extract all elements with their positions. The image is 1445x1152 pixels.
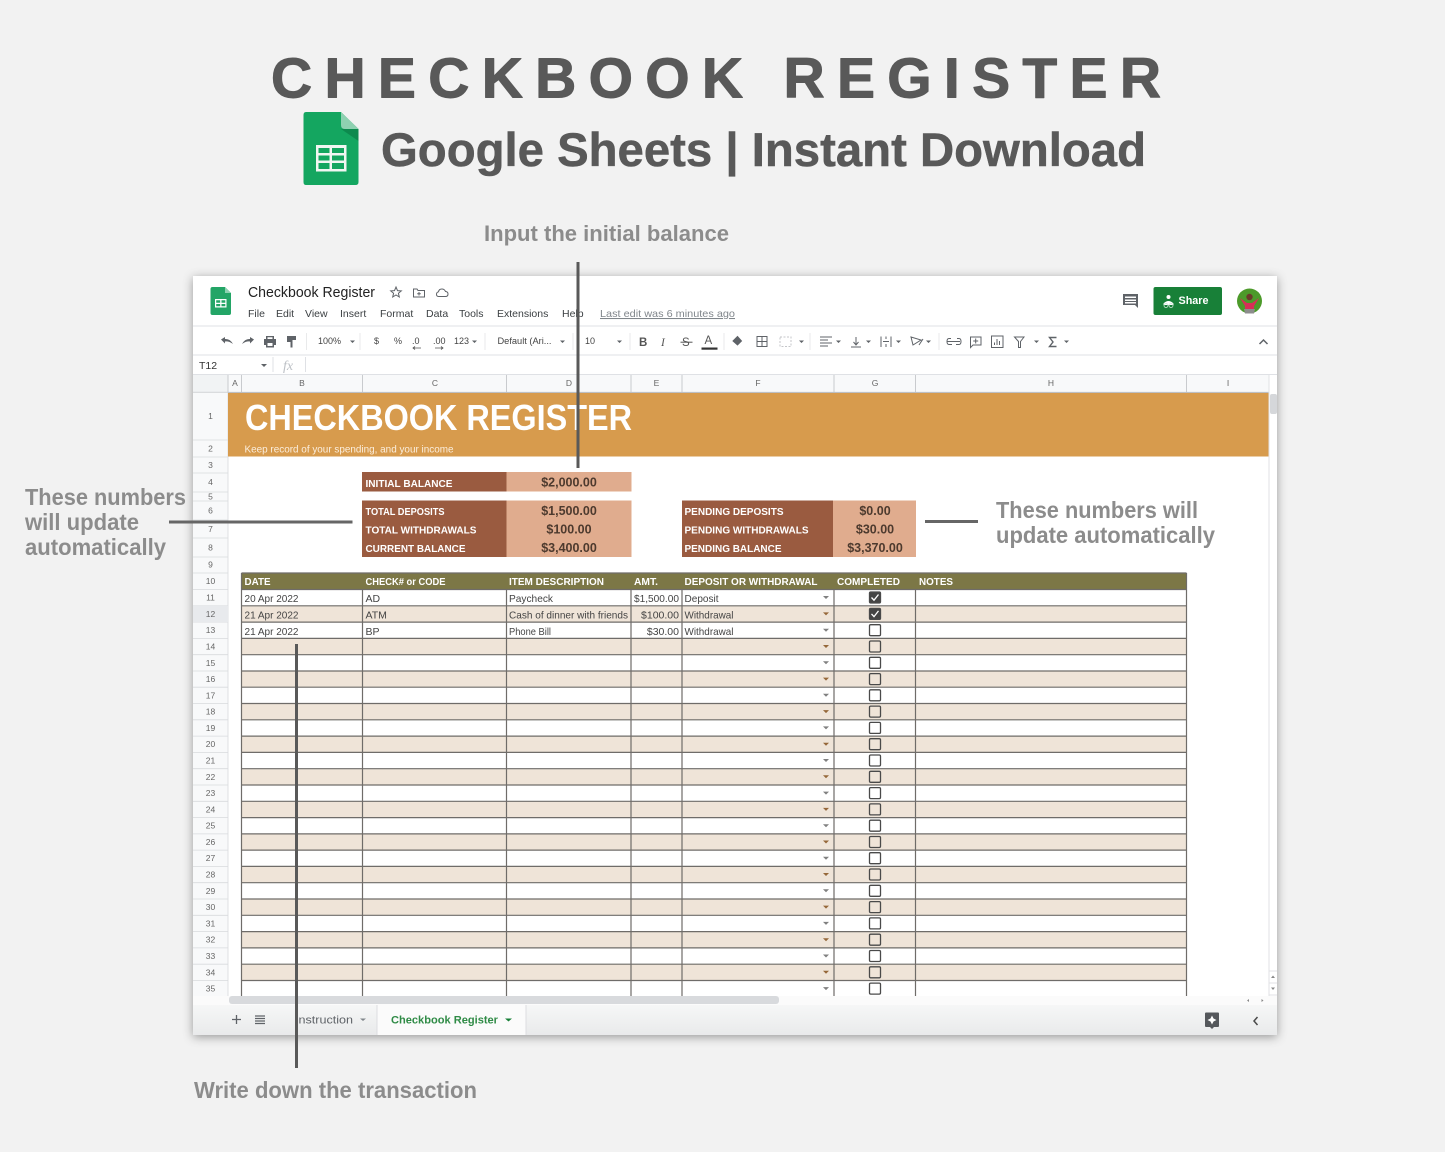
row headers: 6 [208, 506, 213, 516]
toolbar text style icons: A [704, 335, 712, 347]
toolbar history and print icons [221, 336, 296, 348]
panel: initial balance [362, 472, 632, 492]
annotation: left numbers note [24, 484, 186, 560]
row headers: 24 [206, 804, 215, 814]
row headers: 27 [206, 853, 215, 863]
arrow: initial balance pointer [576, 262, 580, 468]
document name: Checkbook Register [248, 285, 375, 301]
panel: totals: TOTAL DEPOSITS [366, 506, 444, 518]
row headers: 5 [208, 492, 213, 502]
panel: pending totals: $3,370.00 [847, 541, 903, 555]
transaction rows: 20 Apr 2022 [244, 593, 299, 605]
transaction rows: AD [366, 593, 381, 605]
spreadsheet window [193, 276, 1277, 1035]
toolbar format labels: .0 [412, 336, 420, 346]
transaction rows: Deposit [684, 593, 719, 605]
toolbar right icons [733, 336, 1268, 348]
icon: explore [1205, 1012, 1219, 1029]
dropdown arrows on white rows [823, 596, 829, 990]
row headers: 13 [206, 625, 215, 635]
row headers: 14 [206, 642, 215, 652]
row headers: 17 [206, 690, 215, 700]
row headers: 4 [208, 477, 213, 487]
row headers: 35 [206, 984, 215, 994]
row headers: 12 [206, 609, 215, 619]
row headers: 16 [206, 674, 215, 684]
dropdown arrows on shaded rows [823, 612, 829, 974]
panel: pending totals: PENDING BALANCE [684, 543, 782, 555]
share button [1154, 287, 1222, 315]
menu bar: Format [380, 308, 413, 320]
transaction rows: Phone Bill [509, 626, 551, 638]
toolbar format labels: $ [374, 336, 379, 346]
icon: sheets mini logo [210, 287, 231, 315]
menu bar: View [305, 308, 328, 320]
row headers [193, 392, 228, 996]
transaction rows: Paycheck [509, 593, 554, 605]
menu bar: Edit [276, 308, 294, 320]
toolbar decimal arrows [413, 346, 443, 350]
annotation: right numbers note: update automatically [996, 522, 1215, 548]
panel: totals: TOTAL WITHDRAWALS [366, 524, 476, 536]
panel: totals: $3,400.00 [541, 541, 597, 555]
toolbar [193, 326, 1277, 374]
row headers: 9 [208, 560, 213, 570]
toolbar text style icons [639, 335, 718, 350]
transaction rows: Withdrawal [684, 610, 734, 622]
menu bar: Tools [459, 308, 484, 320]
row headers: 25 [206, 821, 215, 831]
table header: AMT. [634, 576, 658, 588]
menu bar: Extensions [497, 308, 548, 320]
shaded rows [242, 606, 1186, 980]
toolbar format labels [318, 336, 595, 346]
toolbar format labels: Default (Ari... [498, 336, 552, 346]
row headers: 3 [208, 460, 213, 470]
annotation: right numbers note [996, 497, 1215, 548]
table header: DATE [244, 576, 270, 588]
transaction rows: Cash of dinner with friends [509, 610, 628, 622]
column headers: C [432, 378, 438, 388]
transaction rows: 21 Apr 2022 [244, 610, 299, 622]
panel: initial balance: INITIAL BALANCE [366, 478, 452, 490]
arrow: transaction pointer [295, 644, 298, 1068]
row headers: 34 [206, 967, 215, 977]
row headers: 10 [206, 576, 215, 586]
banner title: CHECKBOOK REGISTER [245, 397, 632, 438]
formula bar: fx [283, 359, 294, 374]
toolbar format labels: 123 [454, 336, 469, 346]
toolbar text style icons: I [660, 337, 666, 349]
transaction table [242, 573, 1186, 996]
subtitle: Google Sheets | Instant Download [381, 123, 1146, 176]
toolbar format labels: 100% [318, 336, 341, 346]
column headers: G [872, 378, 878, 388]
row headers: 26 [206, 837, 215, 847]
annotation: left numbers note: will update [24, 509, 139, 535]
banner [228, 393, 1268, 456]
vertical scrollbar [1269, 375, 1277, 996]
table grid [242, 573, 1186, 996]
table header: COMPLETED [837, 576, 900, 588]
row headers: 2 [208, 444, 213, 454]
annotation: left numbers note: These numbers [25, 484, 186, 510]
table header: DEPOSIT OR WITHDRAWAL [684, 576, 818, 588]
title: CHECKBOOK REGISTER [271, 46, 1161, 110]
table header: NOTES [919, 576, 953, 588]
panel: initial balance: $2,000.00 [541, 476, 597, 490]
avatar [1237, 288, 1262, 314]
row headers: 32 [206, 935, 215, 945]
row headers: 21 [206, 756, 215, 766]
toolbar format labels: % [394, 336, 402, 346]
toolbar text style icons: S [682, 337, 690, 349]
panel: pending totals [682, 500, 916, 557]
annotation: right numbers note: These numbers will [996, 497, 1198, 523]
menu bar: Insert [340, 308, 366, 320]
panel: totals: $1,500.00 [541, 504, 597, 518]
column headers [193, 375, 1269, 392]
row headers: 20 [206, 739, 215, 749]
column headers: B [299, 378, 305, 388]
tab: checkbook register: Checkbook Register [391, 1014, 499, 1026]
column headers: I [1227, 378, 1229, 388]
annotation: write down the transaction: Write down the transaction [194, 1077, 477, 1103]
row headers: 7 [208, 524, 213, 534]
add and list sheet icons [232, 1015, 265, 1024]
icon: collapse side panel [1254, 1017, 1258, 1025]
table header [242, 573, 1186, 590]
transaction rows: $1,500.00 [634, 593, 679, 605]
menu bar: Help [562, 308, 584, 320]
row headers: 23 [206, 788, 215, 798]
icon: comments [1123, 294, 1138, 308]
formula bar: T12 [199, 360, 217, 372]
panel: pending totals: PENDING DEPOSITS [684, 506, 784, 518]
annotation: left numbers note: automatically [25, 534, 166, 560]
row headers: 18 [206, 707, 215, 717]
transaction rows: $100.00 [641, 610, 679, 622]
transaction rows [244, 593, 734, 638]
row headers: 1 [208, 411, 213, 421]
menu bar [248, 308, 584, 320]
row headers: 19 [206, 723, 215, 733]
row headers: 8 [208, 542, 213, 552]
transaction rows: Withdrawal [684, 626, 734, 638]
sheet tabs bar [193, 1005, 1277, 1035]
horizontal scrollbar [193, 996, 1277, 1005]
row headers: 33 [206, 951, 215, 961]
annotation: input the initial balance: Input the initial balance [484, 221, 729, 246]
panel: totals [362, 500, 632, 557]
column headers: F [755, 378, 761, 388]
toolbar format labels: .00 [433, 336, 446, 346]
icon: Google Sheets logo [304, 112, 358, 185]
panel: totals: CURRENT BALANCE [366, 543, 466, 555]
title icons [391, 287, 448, 297]
transaction rows: BP [366, 626, 380, 638]
row headers: 30 [206, 902, 215, 912]
toolbar format labels: 10 [585, 336, 595, 346]
banner subtitle: Keep record of your spending, and your income [244, 444, 454, 456]
arrow: right numbers pointer [925, 520, 978, 523]
column headers: A [232, 378, 238, 388]
formula bar [199, 357, 306, 374]
menu bar: File [248, 308, 265, 320]
menu bar: Data [426, 308, 448, 320]
panel: pending totals: $0.00 [859, 504, 891, 518]
row headers: 31 [206, 918, 215, 928]
last edit link: Last edit was 6 minutes ago [600, 308, 735, 320]
table header: ITEM DESCRIPTION [509, 576, 604, 588]
row headers: 15 [206, 658, 215, 668]
tab: instruction: Instruction [295, 1014, 353, 1026]
share button: Share [1178, 295, 1208, 307]
column headers: H [1048, 378, 1054, 388]
arrow: left numbers pointer [169, 520, 352, 524]
row headers: 28 [206, 870, 215, 880]
table header: CHECK# or CODE [366, 576, 446, 588]
tab: checkbook register [377, 1005, 526, 1035]
checkboxes [870, 592, 880, 994]
column headers: D [566, 378, 572, 388]
panel: pending totals: PENDING WITHDRAWALS [684, 524, 808, 536]
document header [210, 285, 1262, 320]
transaction rows: 21 Apr 2022 [244, 626, 299, 638]
panel: totals: $100.00 [546, 522, 592, 536]
toolbar dropdown carets [350, 340, 1069, 343]
row headers: 29 [206, 886, 215, 896]
transaction rows: ATM [366, 610, 387, 622]
row headers: 11 [206, 593, 215, 603]
row headers: 22 [206, 772, 215, 782]
panel: pending totals: $30.00 [856, 522, 894, 536]
toolbar text style icons: B [639, 337, 647, 349]
transaction rows: $30.00 [647, 626, 679, 638]
column headers: E [654, 378, 660, 388]
